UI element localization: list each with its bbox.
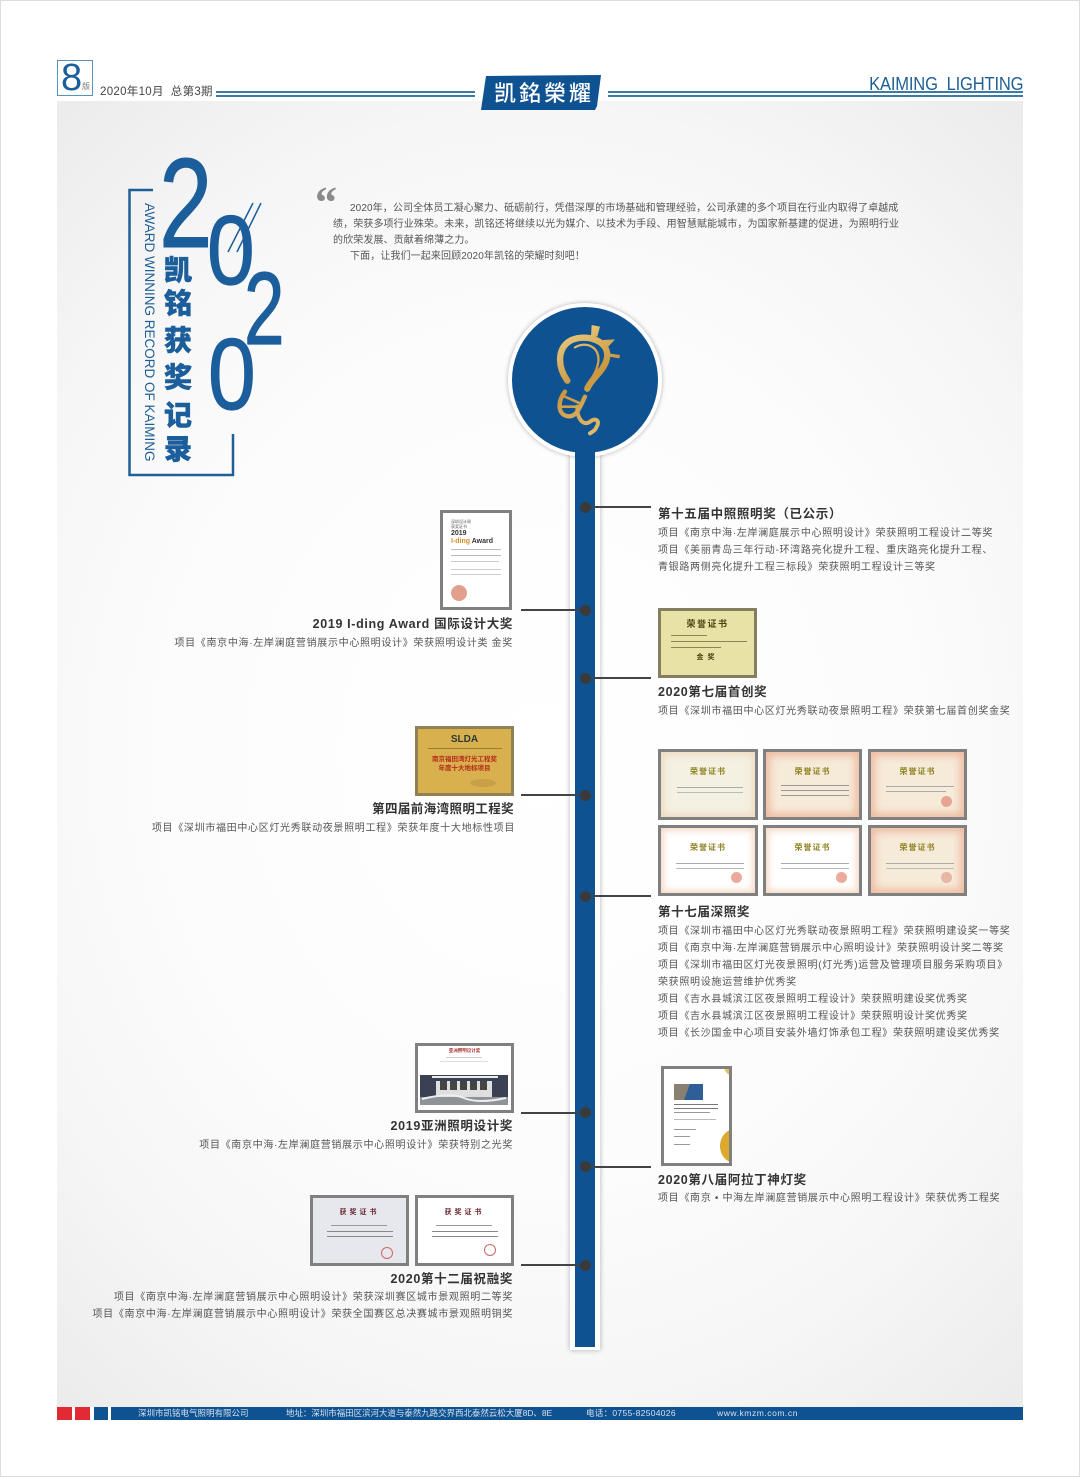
award: 深照奖 text: 项目《深圳市福田区灯光夜景照明(灯光秀)运营及管理项目服务采购项目》 <box>658 960 1008 971</box>
brand name: KAIMING LIGHTING <box>869 73 1023 94</box>
page number box: 8 <box>61 57 82 99</box>
certificates: 深照奖 grid: 荣誉证书 <box>794 767 830 776</box>
award certificate: SLDA: 年度十大地标项目 <box>438 765 490 772</box>
award: 深照奖 text: 荣获照明设施运营维护优秀奖 <box>658 977 797 988</box>
award certificate: I-ding: 获奖证书 <box>451 524 467 529</box>
award certificate: SLDA: 南京福田湾灯光工程奖 <box>432 756 497 763</box>
certificates: 深照奖 grid: 荣誉证书 <box>690 767 726 776</box>
award: 亚洲照明 text: 2019亚洲照明设计奖 <box>391 1119 513 1133</box>
footer bar: 地址：深圳市福田区滨河大道与泰然九路交界西北泰然云松大厦8D、8E <box>286 1408 552 1418</box>
background panel <box>57 101 1023 1407</box>
award: 深照奖 text: 项目《深圳市福田中心区灯光秀联动夜景照明工程》荣获照明建设奖一等奖 <box>658 926 1010 937</box>
award certificate: 首创奖: 荣誉证书 <box>686 619 728 629</box>
bracket <box>130 190 233 475</box>
page number box <box>57 60 93 96</box>
award: 前海湾 text: 第四届前海湾照明工程奖 <box>372 802 514 816</box>
award: 祝融奖 text <box>92 1272 513 1320</box>
footer <box>57 1407 1023 1420</box>
vertical chinese title: 录 <box>164 428 192 468</box>
vertical chinese title: 铭 <box>164 282 192 322</box>
award: 深照奖 text: 项目《长沙国金中心项目安装外墙灯饰承包工程》荣获照明建设奖优秀奖 <box>658 1028 1000 1039</box>
connector dots and lines <box>521 502 651 1271</box>
vertical english: AWARD WINNING RECORD OF KAIMING <box>142 203 157 462</box>
award: 第十五届中照照明奖: 项目《美丽青岛三年行动-环湾路亮化提升工程、重庆路亮化提升工程、 <box>658 545 993 556</box>
award: 深照奖 text: 项目《吉水县城滨江区夜景照明工程设计》荣获照明建设奖优秀奖 <box>658 994 968 1005</box>
footer bar <box>111 1407 1023 1420</box>
award certificate: 首创奖 <box>658 608 757 678</box>
footer bar: 电话：0755-82504026 <box>586 1408 676 1418</box>
intro text <box>333 202 899 262</box>
certificates: 深照奖 grid: 荣誉证书 <box>900 843 936 852</box>
award: 首创奖 text: 项目《深圳市福田中心区灯光秀联动夜景照明工程》荣获第七届首创奖金奖 <box>658 706 1010 717</box>
intro text: 下面，让我们一起来回顾2020年凯铭的荣耀时刻吧！ <box>350 251 585 262</box>
year digits: 0 <box>208 317 256 431</box>
slashes on zero <box>228 203 261 252</box>
title block 2020 <box>128 150 284 476</box>
left double rule <box>216 91 475 97</box>
award certificates: 祝融奖: 获奖证书 <box>340 1209 380 1216</box>
quote mark: “ <box>315 178 337 227</box>
vertical chinese title: 获 <box>164 319 192 359</box>
intro text: 2020年，公司全体员工凝心聚力、砥砺前行，凭借深厚的市场基础和管理经验，公司承建的多个项目在行业内取得了卓越成 <box>350 202 898 214</box>
award: 前海湾 text <box>152 802 515 834</box>
timeline stem <box>570 440 600 1350</box>
award: 第十五届中照照明奖 <box>658 507 993 573</box>
building photo <box>420 1075 508 1105</box>
year digits <box>159 132 284 431</box>
footer bar: www.kmzm.com.cn <box>717 1408 798 1418</box>
certificates: 深照奖 grid: 荣誉证书 <box>690 843 726 852</box>
timeline <box>506 300 664 1353</box>
award: 亚洲照明 text: 项目《南京中海·左岸澜庭营销展示中心照明设计》荣获特别之光奖 <box>199 1140 513 1151</box>
award: 祝融奖 text: 2020第十二届祝融奖 <box>391 1272 513 1286</box>
intro text: 绩，荣获多项行业殊荣。未来，凯铭还将继续以光为媒介、以技术为手段、用智慧赋能城市，为国家新基建的促进，为照明行业 <box>333 219 899 230</box>
footer bar: 深圳市凯铭电气照明有限公司 <box>138 1408 249 1418</box>
issue date: 2020年10月 总第3期 <box>100 86 213 98</box>
certificates: 深照奖 grid: 荣誉证书 <box>900 767 936 776</box>
award: 祝融奖 text: 项目《南京中海·左岸澜庭营销展示中心照明设计》荣获全国赛区总决赛城市景观照明铜奖 <box>92 1309 513 1320</box>
award: I-ding text: 项目《南京中海·左岸澜庭营销展示中心照明设计》荣获照明设计类 金奖 <box>174 638 513 649</box>
award certificate: I-ding: 深圳设计周 <box>451 519 471 524</box>
award: 阿拉丁神灯 text <box>658 1173 1000 1204</box>
award certificate: SLDA: SLDA <box>451 734 478 745</box>
header <box>57 57 1023 110</box>
page number box: 版 <box>82 82 90 91</box>
award certificate: 亚洲照明: 亚洲照明设计奖 <box>449 1048 480 1053</box>
vertical chinese title <box>164 249 192 468</box>
award certificate: 亚洲照明 <box>415 1043 514 1113</box>
vertical chinese title: 奖 <box>164 356 192 396</box>
award: 首创奖 text <box>658 685 1010 717</box>
right double rule <box>608 91 1023 97</box>
certificates: 深照奖 grid: 荣誉证书 <box>794 843 830 852</box>
award certificate: SLDA <box>415 726 514 796</box>
award: 第十五届中照照明奖: 第十五届中照照明奖（已公示） <box>658 507 842 521</box>
award certificate: I-ding: I-ding Award <box>451 538 493 545</box>
award: 祝融奖 text: 项目《南京中海·左岸澜庭营销展示中心照明设计》荣获深圳赛区城市景观照明二等奖 <box>114 1292 513 1303</box>
year digits: 0 <box>207 194 255 305</box>
award certificates: 祝融奖 <box>310 1195 514 1266</box>
section badge: 凯銘榮耀 <box>494 76 594 108</box>
award certificate: 阿拉丁神灯 <box>661 1066 732 1166</box>
year digits: 2 <box>244 251 284 366</box>
award: 第十五届中照照明奖: 项目《南京中海·左岸澜庭展示中心照明设计》荣获照明工程设计二等奖 <box>658 528 993 539</box>
timeline bar <box>575 445 595 1347</box>
intro text: 的欣荣发展、贡献着绵薄之力。 <box>333 235 475 246</box>
logo circle <box>508 303 662 457</box>
award: 深照奖 text: 项目《吉水县城滨江区夜景照明工程设计》荣获照明设计奖优秀奖 <box>658 1011 968 1022</box>
award certificate: I-ding <box>440 510 512 610</box>
award certificate: 首创奖: 金奖 <box>696 654 718 661</box>
award: I-ding text <box>174 617 513 649</box>
icon: gold bulb logo <box>556 325 620 436</box>
award: 深照奖 text: 第十七届深照奖 <box>658 905 750 919</box>
award: 深照奖 text <box>658 905 1010 1039</box>
award certificates: 祝融奖: 获奖证书 <box>444 1209 484 1216</box>
award: 首创奖 text: 2020第七届首创奖 <box>658 685 767 699</box>
award: 深照奖 text: 项目《南京中海·左岸澜庭营销展示中心照明设计》荣获照明设计奖二等奖 <box>658 943 1004 954</box>
award: 阿拉丁神灯 text: 2020第八届阿拉丁神灯奖 <box>658 1173 807 1187</box>
certificates: 深照奖 grid <box>658 749 967 896</box>
award: 亚洲照明 text <box>199 1119 513 1151</box>
vertical chinese title: 凯 <box>164 249 192 289</box>
award certificate: I-ding: 2019 <box>451 530 467 537</box>
award: 前海湾 text: 项目《深圳市福田中心区灯光秀联动夜景照明工程》荣获年度十大地标性项目 <box>152 823 515 834</box>
vertical chinese title: 记 <box>164 394 192 434</box>
award: 阿拉丁神灯 text: 项目《南京 • 中海左岸澜庭营销展示中心照明工程设计》荣获优秀工程奖 <box>658 1193 1000 1204</box>
award: I-ding text: 2019 I-ding Award 国际设计大奖 <box>313 617 513 631</box>
award: 第十五届中照照明奖: 青银路两侧亮化提升工程三标段》荣获照明工程设计三等奖 <box>658 562 936 573</box>
